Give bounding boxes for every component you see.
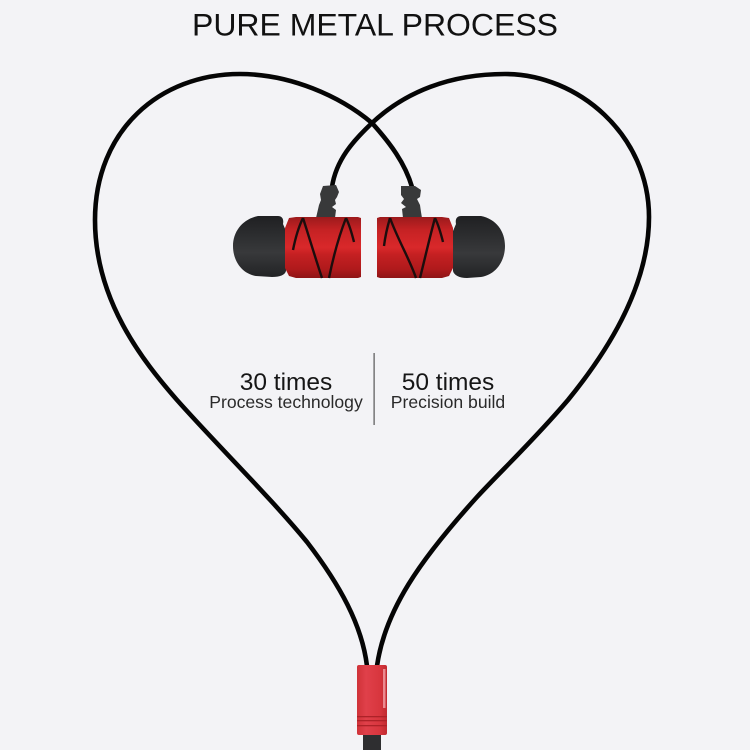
stat 1: 30 times: Process technology	[209, 392, 363, 412]
title: PURE METAL PROCESS	[192, 6, 558, 42]
right ear tip	[453, 216, 505, 278]
left metal body	[285, 217, 361, 278]
stat 2: 50 times: Precision build	[391, 392, 505, 412]
stat 1: 30 times	[209, 369, 363, 412]
left strain relief	[316, 185, 339, 218]
right grooves	[384, 218, 443, 278]
right strain relief	[401, 186, 422, 218]
left ear tip	[233, 216, 286, 277]
divider	[374, 353, 375, 425]
lower cable	[363, 733, 381, 750]
heart-shaped cable	[95, 74, 649, 666]
plug brand marking	[383, 669, 386, 708]
right metal body	[377, 217, 453, 278]
stat 2: 50 times: 50 times	[402, 369, 494, 396]
stat 2: 50 times	[391, 369, 505, 412]
plug ridges	[357, 716, 387, 726]
red plug barrel	[357, 665, 387, 735]
cable plug	[357, 665, 387, 750]
left grooves	[293, 218, 354, 278]
right earbud	[377, 186, 505, 278]
left earbud	[233, 185, 361, 278]
stat 1: 30 times: 30 times	[240, 369, 332, 396]
